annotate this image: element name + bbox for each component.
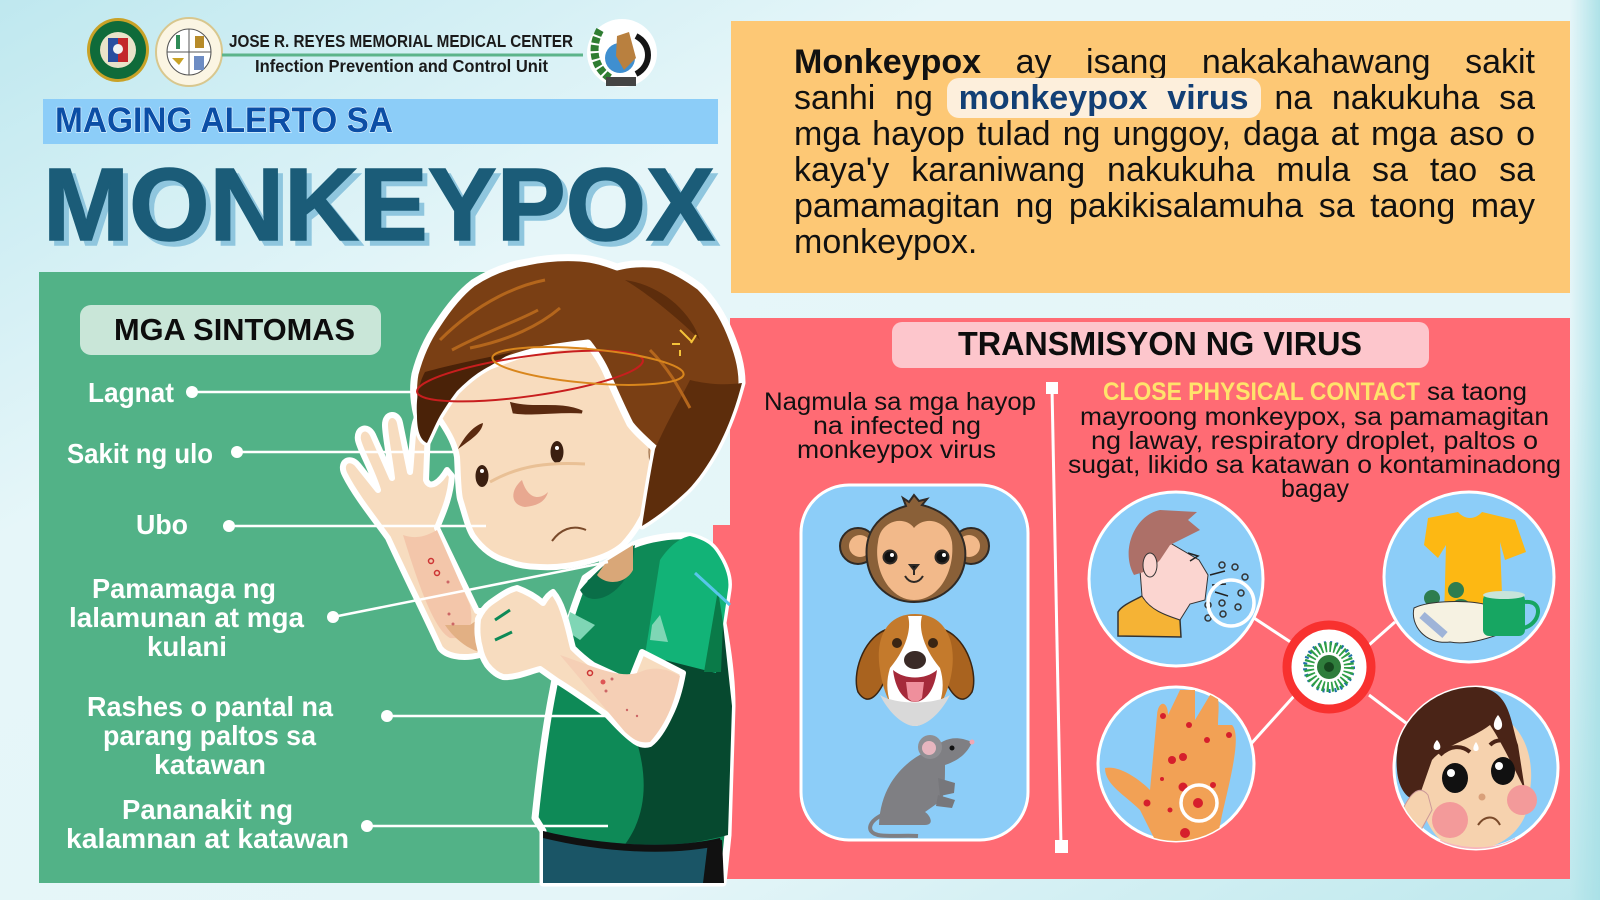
symptom: Sakit ng ulo [67, 438, 457, 469]
text: close physical contact: CLOSE PHYSICAL CONTACT [1103, 378, 1420, 406]
symptom: Pamamaga ng lalamunan at mga kulani: kulani [147, 631, 227, 662]
logo: medical center seal [156, 18, 222, 86]
text block: monkeypox definition: sanhi ng monkeypox virus na nakukuha sa [794, 79, 1535, 117]
symptom: Lagnat [88, 377, 412, 408]
unit name: Infection Prevention and Control Unit [255, 56, 548, 76]
symptom: Ubo [136, 509, 486, 540]
symptom: Sakit ng ulo: Sakit ng ulo [67, 438, 213, 469]
symptom: Rashes o pantal: Rashes o pantal na [87, 691, 333, 722]
boy hair [414, 258, 742, 526]
text: close physical contact: mayroong monkeypox, sa pamamagitan [1080, 403, 1549, 431]
text block: monkeypox definition: kaya'y karaniwang nakukuha mula sa tao sa [794, 151, 1535, 189]
text block: monkeypox definition: Monkeypox ay isang nakakahawang sakit [794, 43, 1535, 81]
text block: monkeypox definition [794, 43, 1536, 261]
text: close physical contact: sa taong [1427, 378, 1527, 406]
symptoms heading: MGA SINTOMAS [114, 312, 355, 347]
icon: monkey [840, 495, 989, 602]
circle: contaminated objects [1384, 492, 1554, 662]
banner: Maging Alerto Sa: MAGING ALERTO SA [55, 101, 393, 140]
text block: monkeypox definition: monkeypox. [794, 223, 977, 261]
title: MONKEYPOX: MONKEYPOX [43, 147, 715, 262]
symptom: Rashes o pantal: parang paltos sa [103, 720, 316, 751]
symptom: Ubo: Ubo [136, 509, 188, 540]
panel: animals [801, 485, 1028, 840]
transmission heading [892, 322, 1429, 368]
hospital name: JOSE R. REYES MEMORIAL MEDICAL CENTER [229, 31, 573, 51]
symptom: Rashes o pantal [87, 691, 608, 780]
panel: symptoms background [39, 272, 599, 883]
boy raised arm and hand [343, 415, 490, 657]
text: animal origin: na infected ng [813, 412, 981, 440]
text block: monkeypox definition: pamamagitan ng pakikisalamuha sa taong may [794, 187, 1535, 225]
text: close physical contact: bagay [1281, 475, 1349, 503]
fever rings over head [414, 330, 696, 412]
symptom: Pananakit ng kalamnan: Pananakit ng [122, 794, 293, 825]
boy body and shirt [535, 536, 732, 883]
symptom: Pananakit ng kalamnan: kalamnan at katawan [66, 823, 349, 854]
symptom: Lagnat: Lagnat [88, 377, 174, 408]
text block: monkeypox definition: mga hayop tulad ng unggoy, daga at mga aso o [794, 115, 1535, 153]
text: animal origin: monkeypox virus [797, 436, 996, 464]
symptom: Rashes o pantal: katawan [154, 749, 266, 780]
symptom: Pananakit ng kalamnan [66, 794, 608, 854]
logo: Department of Health seal [87, 18, 149, 82]
symptoms heading [80, 305, 381, 355]
panel: definition background [731, 21, 1570, 293]
text: close physical contact: ng laway, respiratory droplet, paltos o [1091, 427, 1538, 455]
icon: virus in red ring [1287, 625, 1371, 709]
circle: hand with blisters [1098, 687, 1254, 850]
boy neck [597, 545, 633, 582]
title: MONKEYPOX: MONKEYPOX [48, 152, 720, 267]
panel: transmission background [713, 318, 1570, 879]
circle: sweating child [1393, 687, 1558, 860]
illustration: sick boy [343, 258, 742, 883]
boy front hand and arm [477, 588, 683, 745]
circle: coughing person [1089, 492, 1263, 666]
header: logos and hospital name [87, 18, 657, 87]
boy head and face [420, 340, 687, 567]
text: close physical contact [1068, 378, 1561, 503]
symptom: Pamamaga ng lalamunan at mga kulani: Pamamaga ng [92, 573, 276, 604]
symptom: Pamamaga ng lalamunan at mga kulani: lalamunan at mga [69, 602, 304, 633]
text: close physical contact: sugat, likido sa katawan o kontaminadong [1068, 451, 1561, 479]
divider with end squares [1046, 382, 1068, 853]
transmission heading: TRANSMISYON NG VIRUS [958, 325, 1362, 362]
symptom: Pamamaga ng lalamunan at mga kulani [69, 562, 608, 662]
icon: rat [870, 735, 974, 836]
icon: dog [856, 614, 974, 726]
connector lines to virus [1205, 618, 1406, 795]
logo: unit emblem [587, 19, 657, 87]
text: animal origin: Nagmula sa mga hayop [764, 388, 1036, 416]
banner: Maging Alerto Sa [43, 99, 718, 144]
text: animal origin [764, 388, 1036, 464]
